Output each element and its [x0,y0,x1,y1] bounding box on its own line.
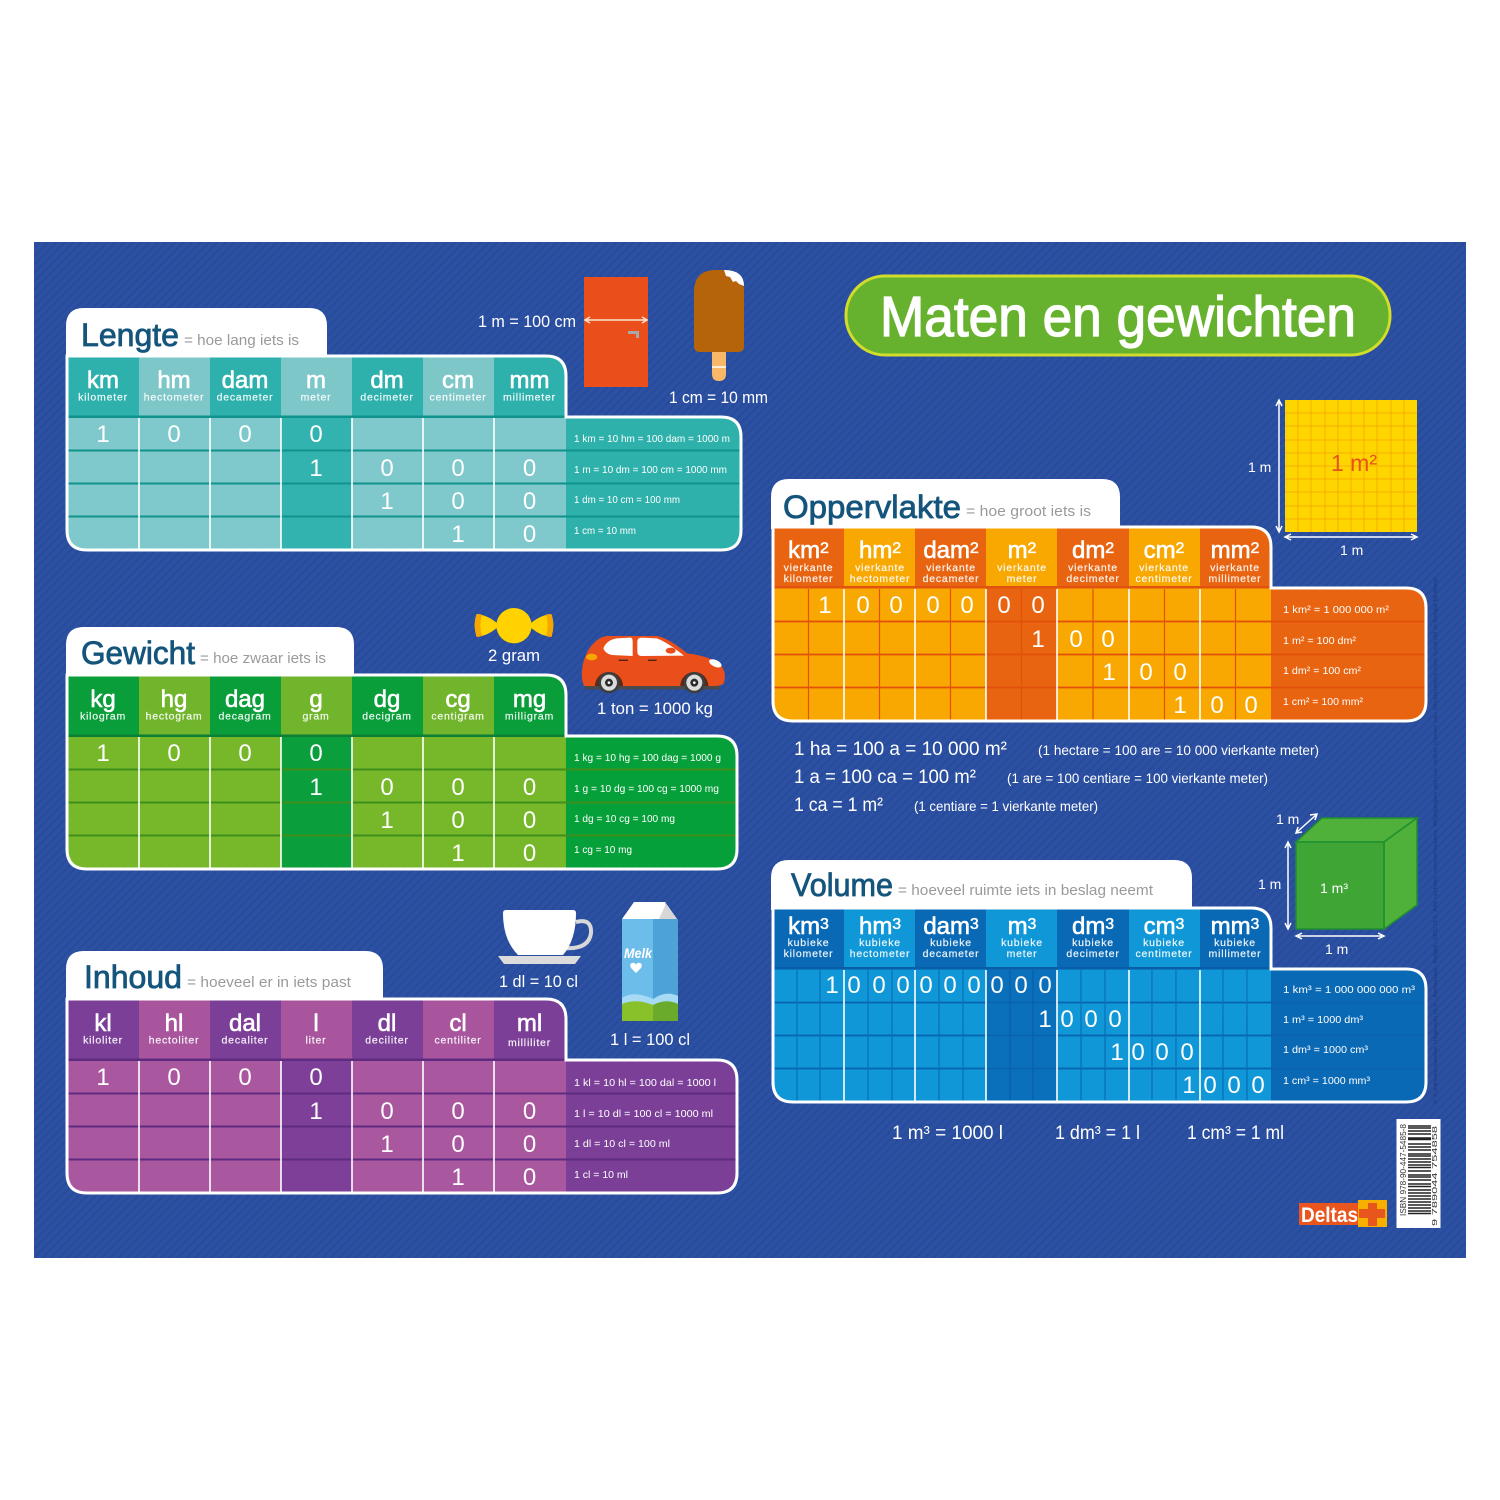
column headers: hm [859,913,892,940]
column headers: g [309,686,323,713]
conversions: 1 dm² = 100 cm² [1283,665,1361,677]
digits: 0 [523,840,536,867]
column headers: hg [161,686,187,713]
heading tab: Volume [771,860,1192,910]
column headers: l [313,1010,319,1037]
column headers: hm [157,367,191,394]
text block: volume equivalents: 1 cm³ = 1 ml [1187,1123,1284,1144]
column headers: km [788,913,820,940]
digits: 0 [451,1131,465,1158]
text block: area units [794,739,1319,816]
conversions: 1 m² = 100 dm² [1283,635,1356,647]
column headers: kl [94,1010,112,1037]
barcode [1396,1119,1440,1228]
conversions: 1 dm³ = 1000 cm³ [1283,1044,1369,1056]
column headers: kubieke [1001,937,1043,949]
conversions: 1 km = 10 hm = 100 dam = 1000 m [574,433,730,445]
conversions: 1 kl = 10 hl = 100 dal = 1000 l [574,1077,716,1089]
heading tab: Oppervlakte: = hoe groot iets is [966,503,1091,520]
icon: cube: 1 m³ [1320,880,1348,896]
digits: 0 [889,592,903,619]
column headers: hectogram [146,710,202,722]
column headers: dm [1072,537,1105,564]
digits: 0 [1014,972,1028,999]
digits: 0 [967,972,981,999]
conversions: 1 km³ = 1 000 000 000 m³ [1283,984,1416,996]
digits: 1 [451,521,465,548]
icon: cube [1258,811,1417,957]
icon: candy [475,608,553,665]
heading tab: Gewicht: Gewicht [81,635,195,671]
digits [818,592,1258,719]
digits: 1 [818,592,832,619]
column headers: meter [301,392,331,404]
digits: 0 [960,592,974,619]
text block: volume equivalents: 1 dm³ = 1 l [1055,1123,1140,1144]
heading tab: Gewicht [66,627,354,677]
digits: 1 [1173,692,1187,719]
column headers: millimeter [1209,573,1261,585]
conversions [1283,604,1390,708]
column headers: cm [1144,537,1176,564]
logo: Deltas [1299,1200,1387,1227]
column headers: ³ [820,912,829,942]
conversions: 1 cg = 10 mg [574,844,632,856]
digits: 1 [96,1064,110,1091]
column headers: m [1008,913,1028,940]
conversions: 1 cm = 10 mm [574,525,636,537]
conversions [1283,984,1416,1087]
digits [825,972,1265,1099]
digits: 0 [451,488,465,515]
digits: 0 [1069,626,1083,653]
column headers: cl [449,1010,467,1037]
digits [96,740,536,867]
digits: 0 [523,1098,536,1125]
column headers: kilometer [78,392,128,404]
column headers [784,912,1261,960]
column headers: kubieke [1143,937,1185,949]
digits: 0 [856,592,870,619]
digits: 1 [1110,1039,1124,1066]
column headers: mm [510,367,549,394]
conversions: 1 l = 10 dl = 100 cl = 1000 ml [574,1108,713,1120]
icon: square metre: 1 m [1248,459,1271,475]
digits: 1 [451,840,465,867]
digits: 0 [1155,1039,1169,1066]
digits: 0 [523,1131,536,1158]
column headers: vierkante [855,562,905,574]
digits: 0 [451,455,465,482]
digits: 0 [167,1064,181,1091]
panel: Inhoud [66,951,747,1200]
column headers: km [87,367,119,394]
icon: coffee cup: 1 dl = 10 cl [499,972,578,991]
digits: 0 [919,972,933,999]
heading tab: Lengte: Lengte [81,317,179,353]
text block: area units: (1 centiare = 1 vierkante meter) [914,798,1098,814]
heading tab: Volume: = hoeveel ruimte iets in beslag neemt [898,882,1154,899]
icon: door: 1 m = 100 cm [478,312,576,331]
column headers: ml [517,1010,542,1037]
digits: 1 [96,421,110,448]
heading tab: Volume: Volume [791,867,893,903]
column headers: dal [229,1010,261,1037]
heading tab: Oppervlakte: Oppervlakte [783,489,961,525]
conversions [574,752,721,856]
conversions: 1 kg = 10 hg = 100 dag = 1000 g [574,752,721,764]
column headers [83,1010,551,1049]
text block: area units: 1 a = 100 ca = 100 m² [794,767,976,788]
text block: area units: (1 hectare = 100 are = 10 000 vierkante meter) [1038,742,1319,758]
digits: 0 [1084,1006,1098,1033]
background panel [34,242,1466,1258]
digits: 0 [451,1098,465,1125]
digits: 1 [380,488,394,515]
column headers: gram [302,710,330,722]
digits: 0 [451,807,465,834]
digits: 0 [1227,1072,1241,1099]
panel: Volume [771,860,1433,1108]
icon: candy: 2 gram [488,646,540,665]
digits: 0 [167,421,181,448]
column headers: vierkante [997,562,1047,574]
column headers: milligram [505,710,554,722]
column headers: dl [378,1010,396,1037]
text block: area units: 1 ha = 100 a = 10 000 m² [794,739,1007,760]
icon: ice lolly: 1 cm = 10 mm [669,388,768,407]
digits: 0 [1031,592,1045,619]
column headers: decimeter [1066,573,1120,585]
column headers: kubieke [788,937,829,949]
column headers: kubieke [859,937,901,949]
conversions: 1 cm² = 100 mm² [1283,696,1363,708]
text block: volume equivalents: 1 m³ = 1000 l [892,1123,1003,1144]
icon: square metre: 1 m² [1331,450,1377,476]
column headers: hectometer [850,948,910,960]
column headers: liter [306,1034,326,1046]
digits: 0 [309,1064,323,1091]
table: Volume [773,908,1433,1108]
digits: 0 [523,521,536,548]
copyright line: © Zuidnederlandse Uitgeverij N.V., Aartselaar, België, S65/161. Alle rechten voorbehouden. Wijzigingen gebruik rechts iconen van Shutterstock.com Gedrukt in Belgie Multiset [1432,577,1439,1104]
column headers: vierkante [784,562,833,574]
panel: Oppervlakte [771,479,1433,727]
digits: 1 [1102,659,1116,686]
digits: 0 [238,421,252,448]
digits: 0 [1173,659,1187,686]
digits: 0 [1108,1006,1122,1033]
heading tab: Lengte: = hoe lang iets is [184,332,299,349]
title banner: Maten en gewichten [880,285,1356,349]
barcode: 9 789044 754858 [1432,1126,1439,1226]
digits: 1 [1182,1072,1196,1099]
column headers: vierkante [1068,562,1118,574]
logo: Deltas: Deltas [1301,1204,1358,1227]
column headers [784,536,1261,585]
column headers: decameter [217,392,273,404]
column headers: kg [90,686,116,713]
column headers: centigram [431,710,485,722]
column headers: decaliter [222,1034,268,1046]
column headers: vierkante [1210,562,1260,574]
column headers: ² [892,536,901,566]
column headers: dg [374,686,400,713]
column headers: ³ [1176,912,1185,942]
column headers: hm [859,537,892,564]
icon: cube: 1 m [1325,941,1348,957]
digits: 0 [1139,659,1153,686]
column headers: kiloliter [83,1034,123,1046]
heading tab: Lengte [66,308,327,358]
digits: 0 [238,740,252,767]
digits: 0 [309,421,323,448]
column headers: kilometer [784,573,833,585]
column headers: kilometer [784,948,833,960]
digits: 0 [1251,1072,1265,1099]
digits: 1 [451,1164,465,1191]
conversions: 1 cm³ = 1000 mm³ [1283,1075,1371,1087]
heading tab: Oppervlakte [771,479,1120,529]
column headers: ² [1176,536,1185,566]
digits: 0 [238,1064,252,1091]
column headers: hectometer [850,573,910,585]
icon: car [582,636,725,718]
digits [96,421,536,548]
icon: milk carton [610,902,690,1049]
digits: 0 [451,774,465,801]
digits: 0 [523,455,536,482]
column headers: ³ [892,912,901,942]
column headers [78,367,556,404]
digits: 0 [523,488,536,515]
column headers: cg [445,686,471,713]
column headers: centiliter [434,1034,482,1046]
column headers: hectoliter [149,1034,199,1046]
icon: car: 1 ton = 1000 kg [597,699,713,718]
digits: 1 [309,774,323,801]
column headers: ² [820,536,829,566]
icon: milk carton: Melk [624,945,653,961]
heading tab: Gewicht: = hoe zwaar iets is [200,650,326,667]
conversions [574,1077,716,1181]
column headers: ² [1028,536,1037,566]
digits: 0 [1101,626,1115,653]
digits: 0 [309,740,323,767]
digits: 0 [1180,1039,1194,1066]
column headers: centimeter [1135,573,1193,585]
icon: square metre: 1 m [1340,542,1363,558]
column headers: meter [1007,948,1037,960]
digits: 1 [380,807,394,834]
digits: 0 [523,1164,536,1191]
digits: 0 [380,1098,394,1125]
column headers: dm [370,367,404,394]
column headers: decameter [923,948,979,960]
icon: square metre [1248,400,1417,558]
column headers: ³ [1251,912,1260,942]
column headers: cm [1144,913,1176,940]
column headers: dam [923,913,970,940]
column headers: decimeter [360,392,414,404]
digits: 1 [96,740,110,767]
text block: volume equivalents [892,1123,1284,1144]
heading tab: Inhoud [66,951,383,1001]
column headers: centimeter [429,392,487,404]
digits: 1 [309,1098,323,1125]
conversions: 1 cl = 10 ml [574,1169,628,1181]
column headers: hl [165,1010,183,1037]
digits: 0 [1244,692,1258,719]
digits: 0 [1210,692,1224,719]
barcode: ISBN 978-90-447-5485-8 [1398,1124,1408,1216]
column headers: km [788,537,820,564]
digits: 1 [825,972,839,999]
conversions: 1 km² = 1 000 000 m² [1283,604,1390,616]
text block: area units: (1 are = 100 centiare = 100 vierkante meter) [1007,770,1268,786]
icon: coffee cup [498,910,591,991]
digits: 0 [943,972,957,999]
digits: 1 [380,1131,394,1158]
digits: 0 [926,592,940,619]
icon: ice lolly [669,270,768,407]
column headers: ² [1105,536,1114,566]
column headers: decimeter [1066,948,1120,960]
column headers: milliliter [508,1037,551,1049]
column headers [80,686,554,722]
icon: milk carton: 1 l = 100 cl [610,1030,690,1049]
digits: 0 [872,972,886,999]
digits: 0 [1060,1006,1074,1033]
column headers: deciliter [365,1034,409,1046]
digits: 0 [523,774,536,801]
heading tab: Inhoud: Inhoud [84,959,182,995]
digits: 0 [380,774,394,801]
column headers: mm [1211,537,1251,564]
digits: 0 [896,972,910,999]
column headers: kubieke [930,937,972,949]
heading tab: Inhoud: = hoeveel er in iets past [187,974,352,991]
digits: 0 [523,807,536,834]
column headers: vierkante [926,562,976,574]
column headers: decagram [218,710,272,722]
conversions [574,433,730,537]
column headers: kilogram [80,710,126,722]
digits [96,1064,536,1191]
column headers: kubieke [1214,937,1256,949]
column headers: vierkante [1139,562,1189,574]
digits: 0 [380,455,394,482]
column headers: dam [222,367,268,394]
column headers: millimeter [1209,948,1261,960]
column headers: millimeter [503,392,556,404]
column headers: dam [923,537,970,564]
column headers: centimeter [1135,948,1193,960]
conversions: 1 m = 10 dm = 100 cm = 1000 mm [574,464,727,476]
column headers: dag [225,686,265,713]
digits: 0 [990,972,1004,999]
digits: 1 [309,455,323,482]
table: Gewicht [67,675,747,876]
conversions: 1 m³ = 1000 dm³ [1283,1014,1364,1026]
column headers: ² [1251,536,1260,566]
table: Oppervlakte [773,527,1433,727]
column headers: decameter [923,573,979,585]
icon: cube: 1 m [1276,811,1299,827]
digits: 0 [1203,1072,1217,1099]
text block: area units: 1 ca = 1 m² [794,795,883,816]
column headers: ² [970,536,979,566]
digits: 1 [1031,626,1045,653]
column headers: ³ [970,912,979,942]
conversions: 1 dm = 10 cm = 100 mm [574,494,680,506]
column headers: mm [1211,913,1251,940]
column headers: cm [442,367,474,394]
column headers: ³ [1028,912,1037,942]
icon: door [478,277,648,387]
digits: 0 [1131,1039,1145,1066]
column headers: dm [1072,913,1105,940]
column headers: hectometer [144,392,204,404]
column headers: decigram [362,710,412,722]
digits: 0 [997,592,1011,619]
column headers: m [1008,537,1028,564]
table: Lengte [67,356,747,557]
column headers: mg [513,686,546,713]
panel: Lengte [66,308,747,557]
icon: cube: 1 m [1258,876,1281,892]
digits: 0 [1038,972,1052,999]
table: Inhoud [67,999,747,1200]
digits: 1 [1038,1006,1052,1033]
conversions: 1 dl = 10 cl = 100 ml [574,1138,670,1150]
conversions: 1 g = 10 dg = 100 cg = 1000 mg [574,783,719,795]
conversions: 1 dg = 10 cg = 100 mg [574,813,675,825]
column headers: meter [1007,573,1037,585]
digits: 0 [847,972,861,999]
column headers: kubieke [1072,937,1114,949]
digits: 0 [167,740,181,767]
column headers: m [306,367,326,394]
panel: Gewicht [66,627,747,876]
column headers: ³ [1105,912,1114,942]
